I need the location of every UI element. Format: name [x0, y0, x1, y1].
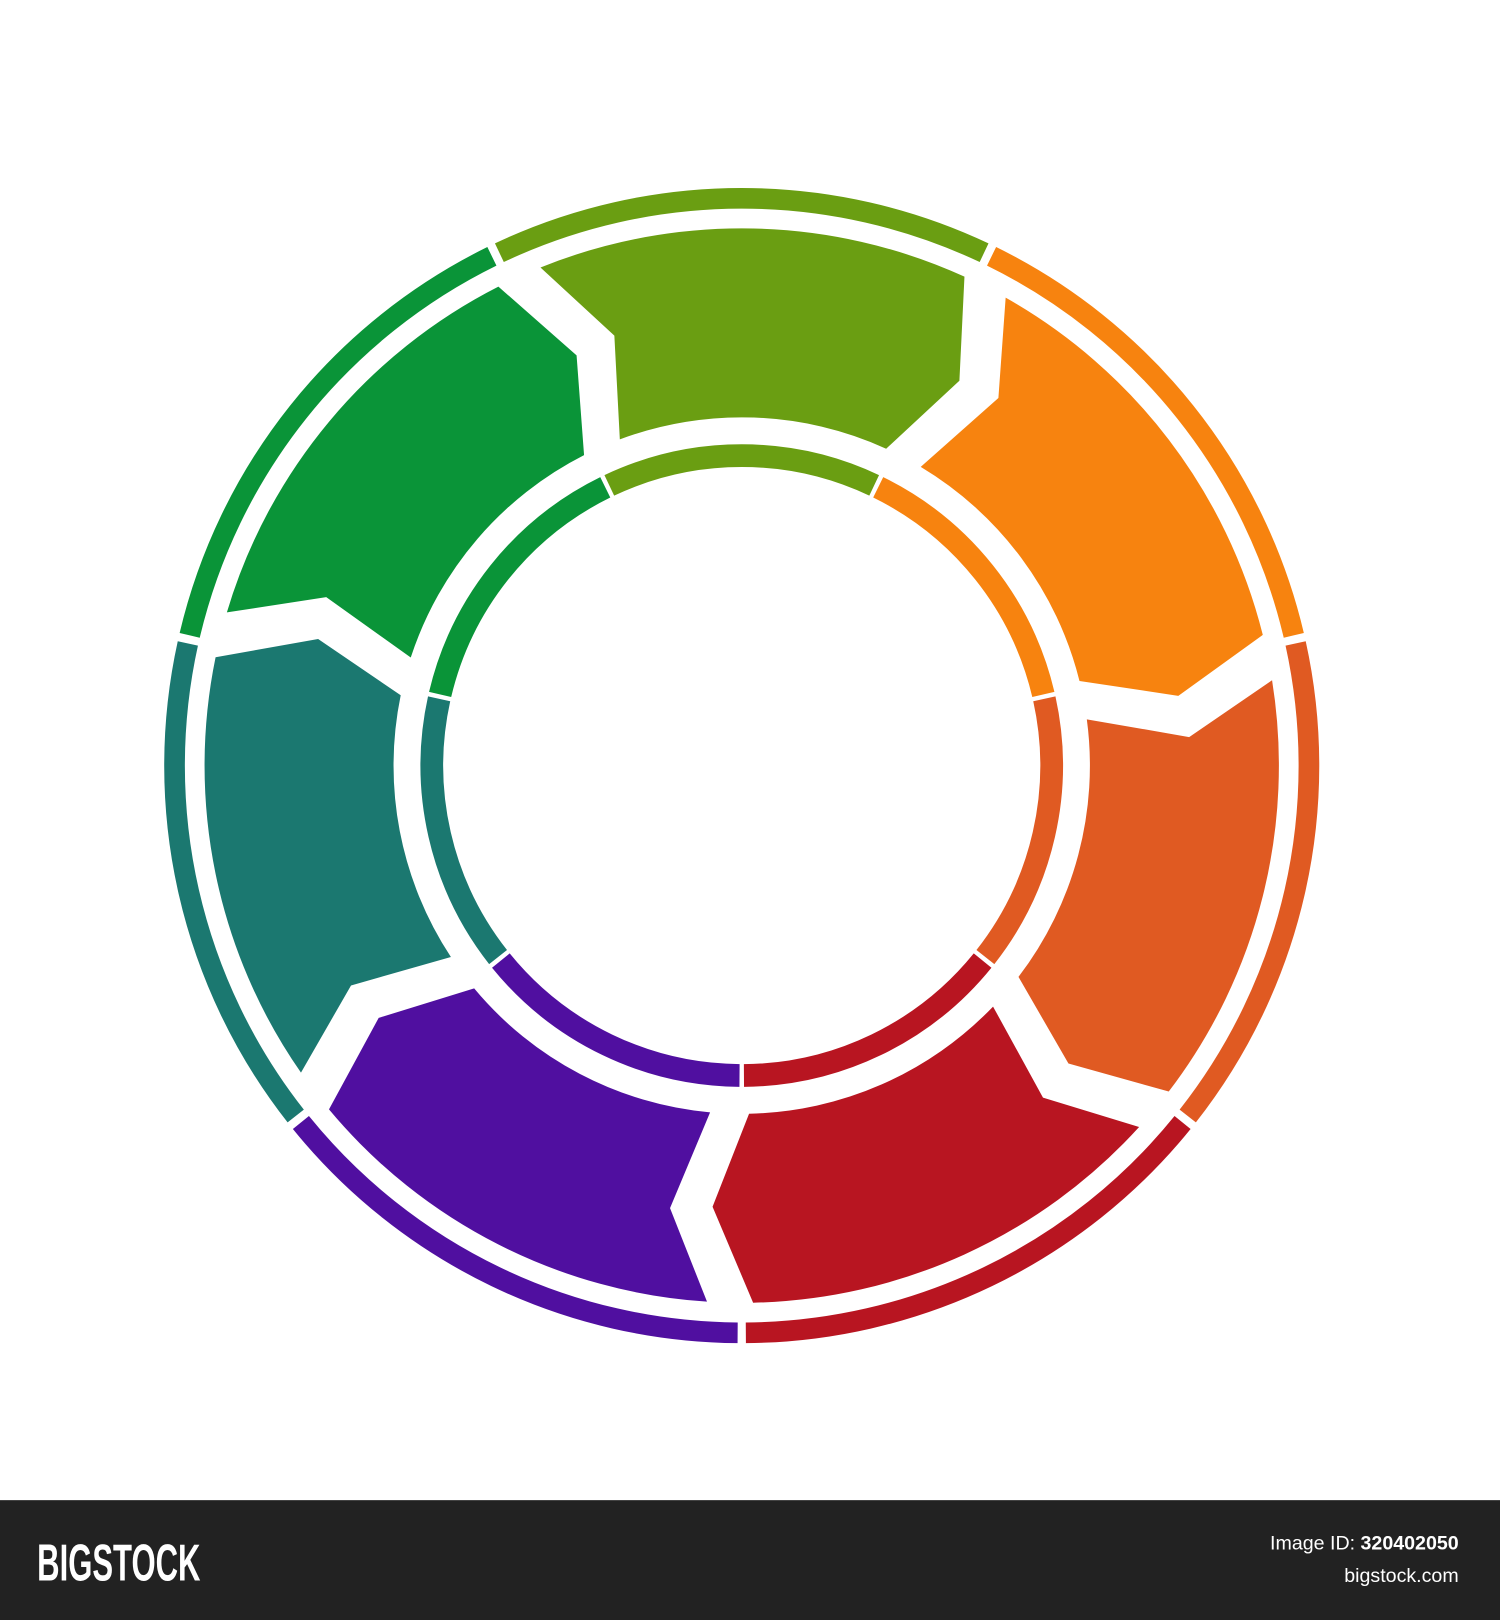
step 4: red: [645, 913, 1206, 1382]
cycle diagram: [135, 198, 1349, 1382]
step 2: orange: [810, 222, 1336, 780]
step 7: green: [147, 222, 674, 780]
step 3: orange-red: [961, 592, 1349, 1128]
step 1: olive: [499, 198, 984, 485]
step 6: teal: [135, 592, 523, 1128]
site url: bigstock.com: [1344, 1565, 1459, 1587]
footer bar: [0, 1500, 1500, 1620]
footer logo: BIGSTOCK: [37, 1534, 200, 1592]
step 5: purple: [277, 913, 839, 1382]
image id: Image ID: 320402050: [1270, 1533, 1459, 1555]
